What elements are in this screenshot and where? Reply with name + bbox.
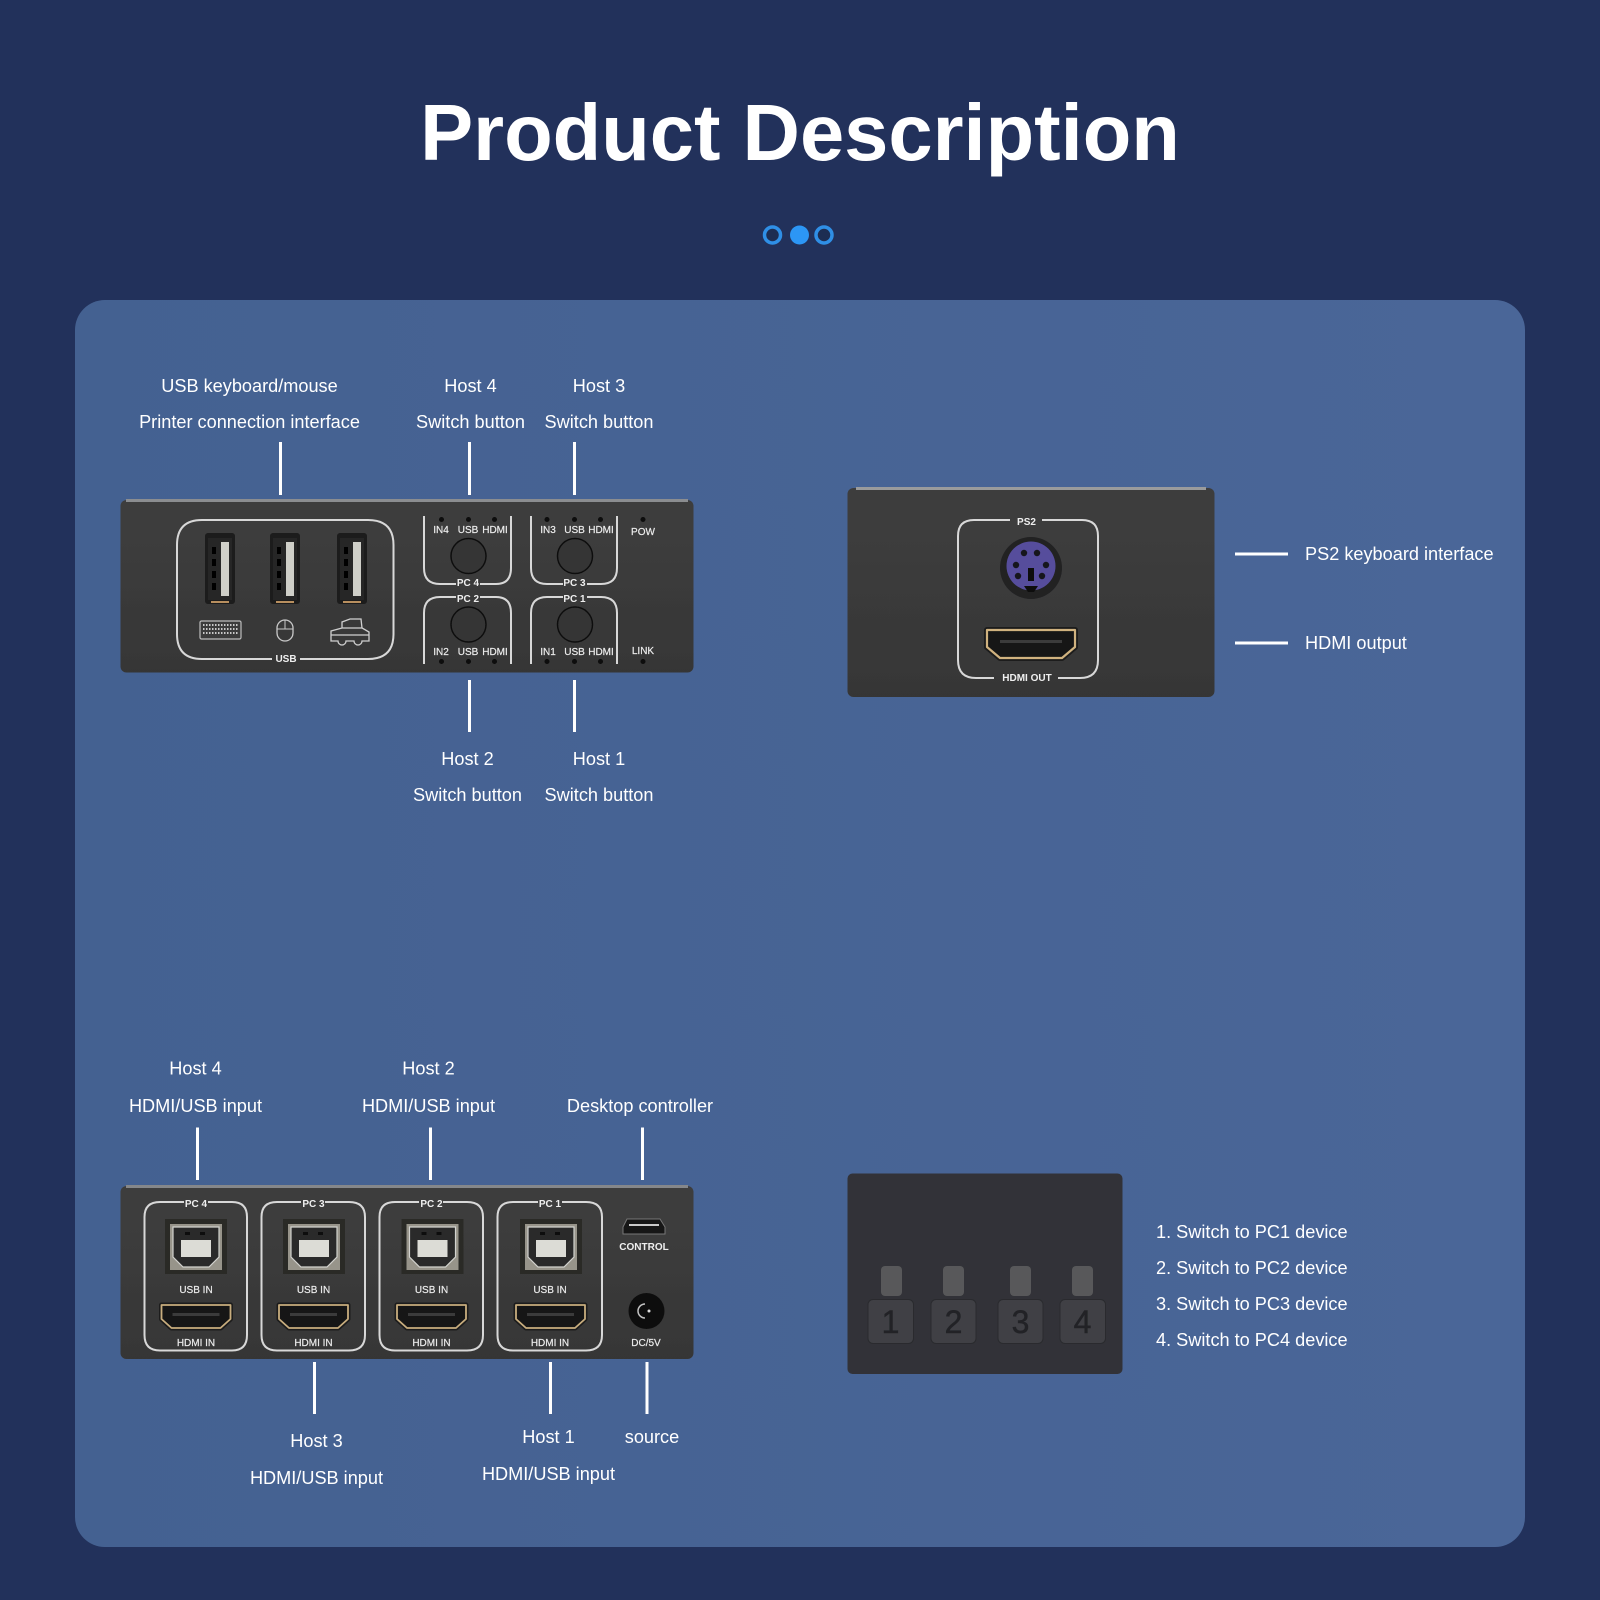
PC 2 button group: [424, 594, 511, 664]
POW indicator: [631, 517, 656, 538]
label: host 4 switch button: Switch button: [416, 412, 525, 432]
label: desktop controller: Desktop controller: [567, 1096, 713, 1116]
PC 3 ports: [262, 1199, 365, 1350]
device: front panel: [120, 499, 694, 672]
PC 4 ports: PC 4: [185, 1199, 208, 1210]
HDMI output port: [987, 630, 1075, 658]
legend list: 2. Switch to PC2 device: [1156, 1258, 1348, 1278]
label: power source: source: [625, 1427, 679, 1447]
label: host 3 input: Host 3: [290, 1431, 343, 1451]
panel: main background: [75, 300, 1525, 1547]
label: HDMI output: HDMI output: [1305, 633, 1407, 653]
leader line: PS2: [1235, 552, 1288, 556]
panel: desktop controller with legend: [848, 1174, 1348, 1374]
panel: front view device with callouts: [120, 376, 694, 805]
PC 3 ports: PC 3: [302, 1199, 325, 1210]
LINK indicator: LINK: [632, 646, 654, 657]
control micro USB port: [619, 1219, 669, 1253]
device body: [120, 1186, 694, 1359]
label: host 3 switch button: Host 3: [573, 376, 625, 396]
PC 2 ports: PC 2: [420, 1199, 443, 1210]
PC 1 button group: HDMI: [588, 647, 614, 658]
PC 1 ports: USB IN: [533, 1285, 567, 1296]
PC 4 button group: PC 4: [457, 578, 480, 589]
label: USB keyboard/mouse: Printer connection interface: [139, 412, 360, 432]
PC 4 button group: USB: [458, 525, 479, 536]
title: Product Description: [420, 88, 1180, 177]
control micro USB port: CONTROL: [619, 1242, 669, 1253]
HDMI OUT label: HDMI OUT: [1002, 673, 1052, 684]
PC 4 ports: [144, 1199, 247, 1350]
legend list: 3. Switch to PC3 device: [1156, 1294, 1348, 1314]
PC 3 button group: IN3: [540, 525, 556, 536]
label: host 1 input: HDMI/USB input: [482, 1464, 615, 1484]
PC 2 ports: USB IN: [415, 1285, 448, 1296]
label: host 3 input: HDMI/USB input: [250, 1468, 383, 1488]
USB port group: [177, 520, 394, 665]
PC 1 button group: [531, 594, 617, 664]
label: host 4 input: Host 4: [169, 1058, 222, 1078]
PC 4 button group: [424, 516, 511, 589]
leader lines: top: [280, 442, 574, 495]
PC 3 ports: USB IN: [297, 1285, 330, 1296]
port outline: [958, 520, 1098, 678]
indicator lights: [881, 1266, 1093, 1296]
leader line: HDMI: [1235, 642, 1288, 644]
PC 3 button group: HDMI: [588, 525, 614, 536]
label: host 4 input: HDMI/USB input: [129, 1096, 262, 1116]
PC 2 button group: IN2: [433, 647, 449, 658]
device body: [120, 500, 694, 672]
legend list: [1156, 1222, 1348, 1350]
label: host 2 switch button: Switch button: [413, 785, 522, 805]
PC 1 ports: PC 1: [539, 1199, 562, 1210]
panel: rear view device with callouts: [120, 1058, 713, 1488]
PC 3 button group: [531, 516, 617, 589]
button numbers: 3: [1012, 1304, 1029, 1340]
USB port group: USB: [275, 654, 297, 665]
button numbers: 1: [882, 1304, 899, 1340]
PC 4 ports: USB IN: [179, 1285, 213, 1296]
LINK indicator: [632, 646, 654, 664]
label: host 1 switch button: Switch button: [545, 785, 653, 805]
DC power jack: DC/5V: [631, 1338, 661, 1349]
label: USB keyboard/mouse: USB keyboard/mouse: [161, 376, 338, 396]
controller body: [848, 1174, 1122, 1374]
PC 2 button group: HDMI: [482, 647, 508, 658]
legend list: 1. Switch to PC1 device: [1156, 1222, 1348, 1242]
label: host 2 switch button: Host 2: [441, 749, 494, 769]
label: host 3 switch button: Switch button: [545, 412, 653, 432]
label: host 1 switch button: Host 1: [573, 749, 625, 769]
PC 3 button group: PC 3: [563, 578, 586, 589]
controller device: [848, 1174, 1122, 1374]
PS2 label: PS2: [1017, 517, 1036, 528]
label: PS2 keyboard interface: PS2 keyboard interface: [1305, 544, 1494, 564]
PC 3 button group: USB: [564, 525, 585, 536]
PC 1 button group: USB: [564, 647, 585, 658]
PC 1 ports: HDMI IN: [531, 1338, 569, 1349]
POW indicator: POW: [631, 527, 656, 538]
button numbers: [882, 1304, 1091, 1340]
PC 3 ports: HDMI IN: [294, 1338, 333, 1349]
leader lines: top: [198, 1128, 642, 1180]
leader lines: bottom: [314, 1362, 647, 1414]
device body: [848, 488, 1214, 697]
device: side panel: [848, 487, 1214, 697]
leader lines: bottom: [470, 680, 574, 732]
button numbers: 4: [1074, 1304, 1091, 1340]
device: rear panel: [120, 1185, 694, 1359]
PC 1 ports: [498, 1199, 602, 1350]
PC 4 button group: HDMI: [482, 525, 508, 536]
label: host 4 switch button: Host 4: [444, 376, 497, 396]
buttons: [868, 1300, 1106, 1344]
label: host 2 input: HDMI/USB input: [362, 1096, 495, 1116]
decorative dots: [764, 226, 832, 244]
DC power jack: [628, 1293, 664, 1349]
PC 1 button group: PC 1: [563, 594, 586, 605]
label: host 2 input: Host 2: [402, 1058, 455, 1078]
button numbers: 2: [945, 1304, 962, 1340]
PC 2 button group: PC 2: [457, 594, 480, 605]
PC 4 ports: HDMI IN: [177, 1338, 215, 1349]
legend list: 4. Switch to PC4 device: [1156, 1330, 1348, 1350]
PC 1 button group: IN1: [540, 647, 556, 658]
label: host 1 input: Host 1: [522, 1427, 575, 1447]
PC 2 button group: USB: [458, 647, 479, 658]
PS2 port: [1000, 537, 1062, 599]
PC 4 button group: IN4: [433, 525, 449, 536]
PC 2 ports: [380, 1199, 483, 1350]
panel: PS2 side device with callouts: [848, 487, 1494, 697]
PC 2 ports: HDMI IN: [412, 1338, 451, 1349]
